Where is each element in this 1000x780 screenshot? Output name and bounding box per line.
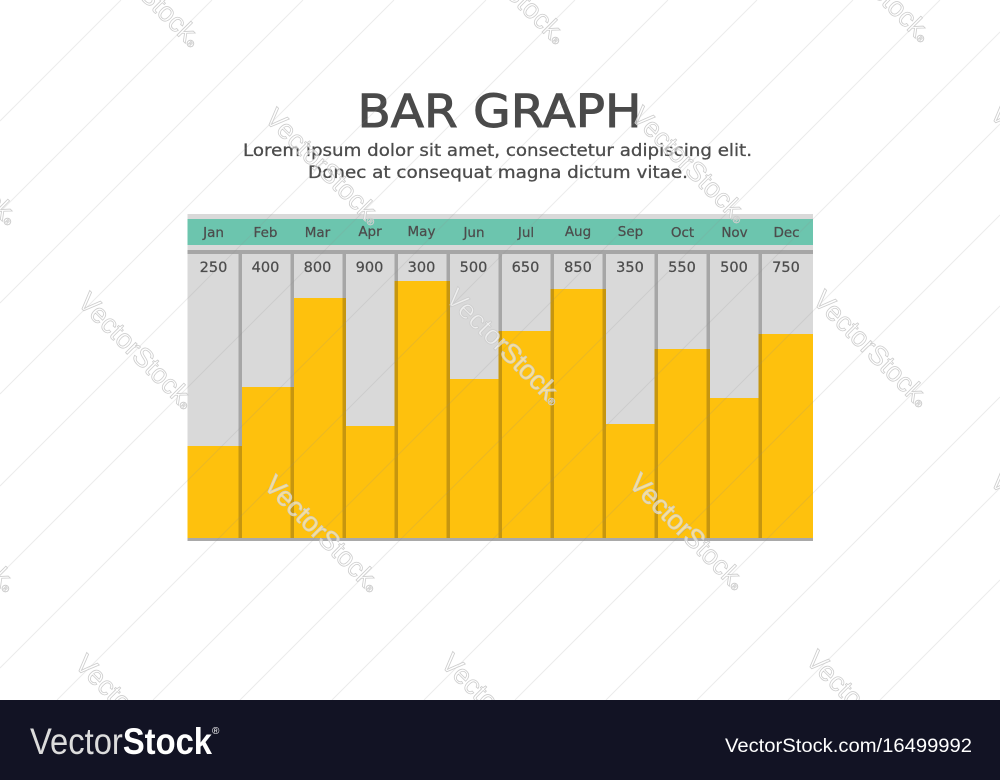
watermarks: VectorStock®: [69, 648, 198, 777]
month header band: Feb: [254, 225, 277, 241]
subtitle: Donec at consequat magna dictum vitae.: [308, 163, 688, 183]
watermarks: VectorStock®: [625, 100, 754, 229]
watermarks: VectorStock®: [800, 644, 929, 773]
bar value labels: 750: [772, 260, 800, 276]
subtitle: [243, 141, 752, 183]
registered mark: ®: [212, 726, 220, 737]
bar value labels: 500: [460, 260, 487, 276]
footer bar: [0, 700, 1000, 780]
bar value labels: 650: [512, 260, 539, 276]
watermarks: VectorStock®: [807, 284, 936, 413]
watermarks: VectorStock®: [259, 102, 388, 231]
month header band: Jun: [462, 225, 485, 241]
bar value labels: 300: [408, 260, 435, 276]
watermarks: VectorStock®: [623, 467, 752, 596]
title: BAR GRAPH: [358, 85, 642, 138]
month header band: Aug: [565, 224, 591, 240]
chart background: [188, 214, 813, 541]
month header band: May: [408, 224, 435, 240]
footer image id: VectorStock.com/16499992: [725, 736, 972, 757]
yellow bars: [188, 281, 813, 538]
month header band: Apr: [358, 224, 382, 240]
month header band: Oct: [671, 225, 694, 241]
month header band: [188, 219, 813, 245]
bar value labels: 400: [252, 260, 279, 276]
month header band: Dec: [773, 225, 800, 241]
month header band: Nov: [721, 225, 748, 241]
watermarks: VectorStock®: [440, 282, 569, 411]
bar value labels: 800: [304, 260, 331, 276]
subtitle: Lorem ipsum dolor sit amet, consectetur adipiscing elit.: [243, 141, 752, 161]
footer logo: VectorStock: [30, 721, 212, 762]
bar value labels: 550: [668, 260, 696, 276]
bar value labels: 250: [200, 260, 227, 276]
bar value labels: 900: [356, 260, 383, 276]
bar value labels: 850: [564, 260, 592, 276]
bar value labels: 500: [720, 260, 748, 276]
month header band: Jul: [517, 225, 534, 241]
bar value labels: [200, 260, 800, 276]
month header band: Mar: [305, 225, 331, 241]
watermarks: VectorStock®: [435, 647, 564, 776]
bar value labels: 350: [616, 260, 644, 276]
month header band: Jan: [202, 225, 224, 241]
month header band: Sep: [618, 224, 643, 240]
chart: monthly bar graph: [188, 214, 813, 541]
watermarks: VectorStock®: [72, 286, 201, 415]
watermarks: VectorStock®: [258, 469, 387, 598]
